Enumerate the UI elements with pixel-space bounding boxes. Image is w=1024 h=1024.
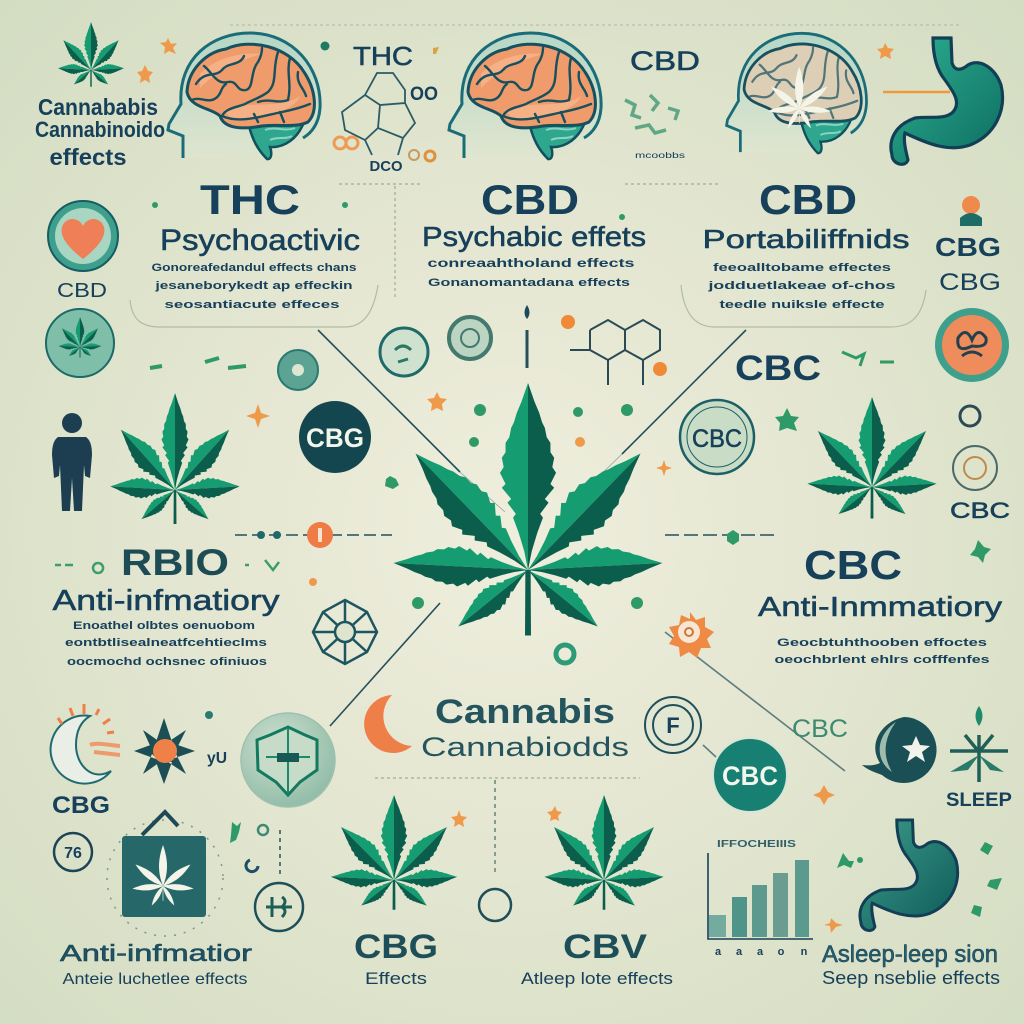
panel: CBC anti-inflammatory [758, 542, 1002, 666]
label: asleep effects [822, 941, 1000, 988]
label: CBG effects: Effects [365, 969, 427, 988]
icon: CBG badge [299, 401, 371, 473]
panel: THC: Gonoreafedandul effects chans [152, 262, 356, 274]
icon: top right CBG stack: CBG [939, 269, 1001, 296]
icon: small ring between leaves [479, 889, 511, 921]
icon: person [52, 413, 92, 511]
bar chart: IFFOCHEIIIS [717, 839, 796, 850]
icon: crescent moon with rays [51, 704, 120, 819]
icon: flower [134, 711, 227, 784]
icon: left leaf [110, 393, 240, 525]
panel: CBC anti-inflammatory: oeochbrlent ehlrs cofffenfes [774, 654, 990, 666]
panel: RBIO anti-inflammatory: Anti-infmatiory [52, 585, 280, 617]
panel: RBIO anti-inflammatory: RBIO [121, 542, 229, 583]
icon: THC molecule: DCO [370, 158, 403, 175]
label: asleep effects: Seep nseblie effects [822, 968, 1000, 988]
icon: right leaf [807, 397, 937, 519]
icon: CBC ring [680, 400, 754, 474]
heading: CBD small with scattered molecule: mcoobbs [635, 151, 685, 160]
icon: small marks and CBC label on right [950, 406, 1010, 523]
panel: CBD right: teedle nuiksle effecte [720, 299, 884, 311]
panel: CBD centre: conreaahtholand effects [428, 256, 635, 270]
bar chart: a [715, 946, 722, 958]
icon: F ring [645, 697, 701, 753]
icon: bottom leaf two [544, 795, 664, 910]
panel: CBC anti-inflammatory: CBC [804, 542, 902, 588]
icon: star moon [862, 717, 937, 783]
icon: leaf box [107, 812, 223, 936]
panel: THC: seosantiacute effeces [164, 299, 340, 311]
icon: F ring: F [666, 713, 680, 738]
label: CBV effects: CBV [563, 928, 647, 966]
icon: brain head THC [168, 33, 320, 159]
icon: small teal ring [556, 645, 574, 663]
icon: brain head with leaf [727, 33, 866, 153]
heading: Cannabis Cannabinoids: Cannabiodds [421, 732, 629, 762]
panel: CBD centre: CBD [481, 176, 579, 223]
panel: CBD right: feeoalltobame effectes [713, 262, 891, 274]
icon: 26 ring: 76 [64, 845, 82, 862]
label: asleep effects: Asleep-leep sion [822, 941, 998, 968]
panel: RBIO anti-inflammatory: Enoathel olbtes oenuobom [73, 620, 255, 632]
icon: THC molecule [320, 41, 439, 175]
icon: sleep plant: SLEEP [946, 790, 1012, 811]
icon: orange node [257, 522, 333, 548]
bar chart: o [778, 946, 785, 958]
label: anti-inflammatory bottom left: Anti-infmatior [60, 940, 252, 966]
heading: Cannabis Cannabinoids [421, 693, 629, 762]
icon: CBG badge: CBG [306, 423, 364, 453]
panel: RBIO anti-inflammatory: oocmochd ochsnec ofiniuos [67, 656, 267, 668]
panel: CBD right: Portabiliffnids [702, 224, 910, 254]
icon: heart circle CBD: CBD [57, 280, 107, 302]
icon: top right CBG stack [935, 196, 1001, 296]
icon: THC molecule: OO [410, 84, 438, 105]
icon: stomach bottom right [860, 820, 958, 931]
title block: effects [50, 144, 126, 170]
label: anti-inflammatory bottom left [60, 940, 252, 988]
icon: top right CBG stack: CBG [935, 232, 1001, 262]
icon: green shield badge [241, 713, 335, 807]
panel: CBD centre [395, 176, 646, 300]
panel: CBD right: jodduetlakeae of-chos [707, 280, 896, 292]
panel: THC: jesaneborykedt ap effeckin [154, 280, 353, 292]
icon: small marks and CBC label on right: CBC [950, 498, 1010, 523]
panel: CBD right [625, 176, 926, 327]
panel: RBIO anti-inflammatory [52, 542, 280, 668]
icon: small circles and hexagons above central leaf [278, 305, 667, 390]
icon: orange circle [935, 308, 1009, 382]
panel: RBIO anti-inflammatory: eontbtlisealneatfcehtieclms [65, 637, 267, 649]
icon: flower: yU [207, 750, 227, 767]
panel: THC: Psychoactivic [160, 224, 360, 257]
icon: 26 ring [54, 833, 92, 871]
icon: orange sun node [669, 612, 714, 658]
panel: CBD right: CBD [759, 176, 857, 223]
icon: stomach top right [883, 38, 1003, 164]
icon: polygon wheel [313, 600, 377, 664]
panel: CBD centre: Gonanomantadana effects [428, 277, 630, 289]
icon: CBC teal badge: CBC [722, 761, 778, 791]
icon: small round glyph [230, 822, 303, 931]
panel: CBD centre: Psychabic effets [422, 221, 646, 252]
icon: heart circle CBD [48, 201, 118, 302]
icon: central cannabis leaf [392, 383, 664, 637]
title block: Cannababis [38, 94, 158, 120]
panel: THC [130, 176, 420, 327]
label: CBV effects [521, 928, 673, 988]
label: CBC faded: CBC [792, 715, 848, 743]
label: CBG effects: CBG [354, 928, 438, 966]
icon: orange moon [364, 695, 412, 753]
label: anti-inflammatory bottom left: Anteie luchetlee effects [62, 971, 248, 988]
bar chart: a [736, 946, 743, 958]
title block: Cannabinoido [35, 117, 165, 142]
panel: CBC anti-inflammatory: Anti-Inmmatiory [758, 591, 1002, 622]
label: CBV effects: Atleep lote effects [521, 969, 673, 988]
icon: crescent moon with rays: CBG [52, 792, 110, 819]
label: CBG effects [354, 928, 438, 988]
icon: sleep plant [946, 706, 1012, 811]
bar chart: a [757, 946, 764, 958]
icon: brain head CBD [449, 33, 601, 159]
heading: CBD small with scattered molecule: CBD [630, 46, 700, 76]
heading: CBD small with scattered molecule [625, 46, 700, 160]
panel: CBC anti-inflammatory: Geocbtuhthooben effoctes [777, 637, 987, 649]
connector lines [230, 25, 960, 872]
panel: THC: THC [200, 176, 300, 223]
icon: leaf circle [46, 309, 114, 377]
icon: CBC teal badge [713, 738, 787, 812]
icon: title leaf [58, 22, 124, 87]
icon: THC molecule: THC [353, 41, 413, 71]
label: CBC right heading: CBC [735, 349, 821, 388]
bar chart: n [801, 946, 808, 958]
title block [35, 22, 165, 170]
icon: bottom leaf one [330, 795, 458, 910]
heading: Cannabis Cannabinoids: Cannabis [435, 693, 615, 731]
decorative specks [137, 38, 894, 933]
icon: CBC ring: CBC [692, 425, 742, 453]
bar chart [708, 839, 813, 958]
